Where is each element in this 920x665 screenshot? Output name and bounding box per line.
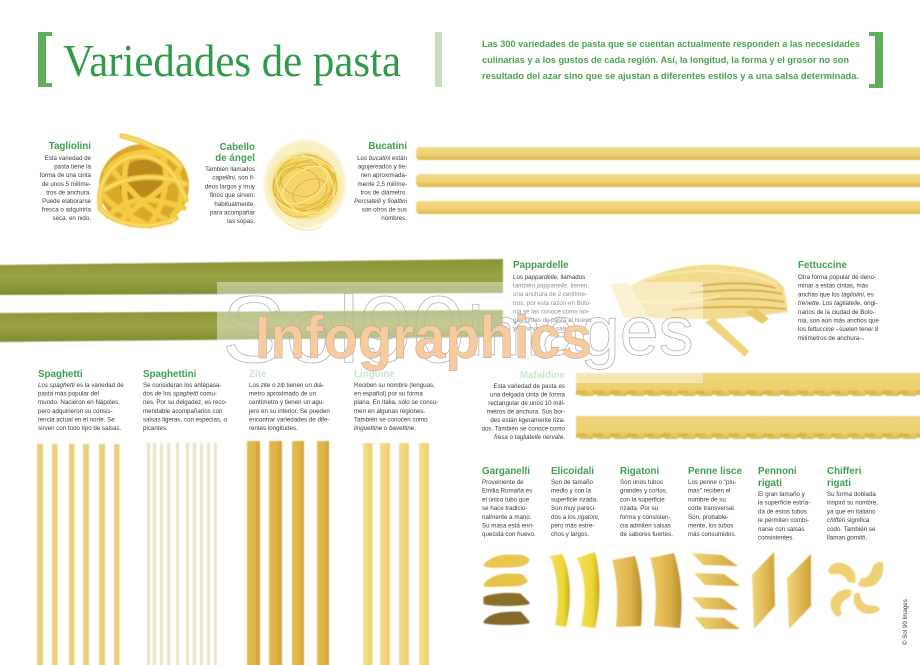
panel: garganelli: Garganelli xyxy=(482,466,530,477)
panel: pappardelle: tros, por esta razón en Bolo- xyxy=(513,300,591,307)
panel: spaghetti: Spaghetti xyxy=(38,369,83,380)
panel: zite xyxy=(247,369,330,665)
panel: spaghetti: sirven con todo tipo de salsas. xyxy=(38,425,122,432)
panel: linguine: plana. En Italia, sólo se consu- xyxy=(354,399,438,406)
panel: fettuccine: anchas que los tagliolini, es xyxy=(798,291,874,298)
panel: penne lisce: Penne lisce xyxy=(688,466,742,477)
panel: rigatoni: Son unos tubos xyxy=(620,479,663,486)
panel: fettuccine: minar a estas cintas, más xyxy=(798,283,868,290)
panel: elicoidali: Son de tamaño xyxy=(551,479,594,486)
panel: garganelli xyxy=(482,466,536,624)
panel: spaghettini: mendable acompañarlos con xyxy=(143,408,223,415)
panel: cabello de angel: deos largos y muy xyxy=(205,183,256,190)
panel: rigatoni: de sabores fuertes. xyxy=(620,531,673,538)
panel: cabello de angel: habitualmente, xyxy=(214,201,255,208)
panel: linguine: linguettine o bavettine. xyxy=(354,425,416,432)
panel: zite: encontrar variedades de dife- xyxy=(249,416,330,423)
panel: chifferi rigati: rigati xyxy=(827,478,851,489)
panel: garganelli: nalmente a mano. xyxy=(482,514,532,521)
panel: mafaldine: metros de anchura. Sus bor- xyxy=(487,408,565,416)
panel: rigatoni: cia admiten salsas xyxy=(620,522,671,530)
panel: chifferi rigati xyxy=(827,466,883,617)
icon: mafaldine strands xyxy=(576,373,920,439)
panel: chifferi rigati: chifferi significa xyxy=(827,517,869,524)
panel: chifferi rigati: codo. También se xyxy=(827,526,876,533)
icon: spaghetti strands xyxy=(37,444,120,665)
panel: fettuccine: Fettuccine xyxy=(798,260,848,271)
panel: spaghetti: pasta más popular del xyxy=(38,391,99,398)
panel: chifferi rigati: llaman gomitti. xyxy=(827,534,867,542)
icon: elicoidali xyxy=(550,552,600,628)
panel: linguine: en español) por su forma xyxy=(354,391,423,398)
panel: zite: jero en su interior. Se pueden xyxy=(248,408,330,415)
panel: spaghetti: pero adquirieron su consis- xyxy=(38,408,113,415)
panel: pennoni rigati: la superficie estría- xyxy=(758,500,810,507)
panel: garganelli: Proveniente de xyxy=(482,479,524,486)
panel: pappardelle: gas cintas de pasta al huevo xyxy=(513,317,592,324)
panel: tagliolini: tros de anchura. xyxy=(46,189,91,196)
panel: zite: metro aproximado de un xyxy=(249,391,317,398)
credit: © Sol 90 Images xyxy=(902,599,909,645)
icon: cabello de angel nest xyxy=(263,140,346,230)
panel: fettuccine: milímetros de anchura–. xyxy=(798,335,865,342)
panel: fettuccine: nia, son aún más anchos que xyxy=(798,318,879,324)
panel: pappardelle: Pappardelle xyxy=(513,260,569,271)
watermark xyxy=(217,277,703,383)
panel: cabello de angel: de ángel xyxy=(215,153,255,164)
panel: cabello de angel xyxy=(205,140,346,230)
panel: bucatini: Perciatelli y fioattini xyxy=(354,198,407,205)
panel: chifferi rigati: Chifferi xyxy=(827,466,862,477)
panel: penne lisce xyxy=(688,466,742,629)
panel: linguine: men en algunas regiones. xyxy=(354,408,425,415)
panel: cabello de angel: para acompañar xyxy=(210,210,255,216)
panel: spaghettini: Se consideran los antepasa- xyxy=(143,382,221,389)
panel: penne lisce: Son, probable- xyxy=(688,514,729,521)
icon: spaghettini strands xyxy=(147,443,217,665)
panel: mafaldine: dos. También se conoce como xyxy=(482,426,566,432)
panel: mafaldine xyxy=(482,370,920,441)
watermark: Sol90 xyxy=(222,277,465,383)
panel: pappardelle: también pappanelle, tienen xyxy=(513,283,587,290)
green pasta strips xyxy=(0,259,503,342)
panel: cabello de angel: Cabello xyxy=(220,142,255,153)
panel: spaghettini: Spaghettini xyxy=(143,369,197,380)
panel: mafaldine: rectangular de unos 10 milí- xyxy=(488,400,565,407)
panel: spaghetti xyxy=(37,369,124,665)
icon: bucatini strands xyxy=(416,147,920,214)
panel: elicoidali xyxy=(550,466,600,628)
panel: rigatoni: grandes y cortos, xyxy=(620,488,668,495)
panel: tagliolini: fresca o adquirirla xyxy=(42,207,92,214)
panel: garganelli: quecida con huevo. xyxy=(482,531,536,538)
panel: spaghetti: Los spaghetti es la variedad de xyxy=(38,382,124,389)
panel: cabello de angel: las sopas. xyxy=(227,218,255,225)
panel: linguine: Linguine xyxy=(354,369,395,380)
panel: pappardelle: y se sirven con salsas. xyxy=(513,326,576,333)
panel: penne lisce: más consumidos. xyxy=(688,531,736,538)
heading: Variedades de pasta xyxy=(63,36,401,86)
panel: tagliolini: seca, en nido. xyxy=(52,215,91,222)
panel: garganelli: Su masa está enri- xyxy=(482,522,534,530)
panel: tagliolini: forma de una cinta xyxy=(40,172,92,179)
panel: fettuccine: narios de la ciudad de Bolo- xyxy=(798,309,875,316)
panel: tagliolini: Puede elaborarse xyxy=(42,198,92,205)
panel: tagliolini xyxy=(40,136,189,228)
panel: pennoni rigati: El gran tamaño y xyxy=(758,491,806,498)
panel: tagliolini: de unos 5 milíme- xyxy=(42,181,91,188)
panel: elicoidali: dos a los rigatoni, xyxy=(551,514,600,521)
watermark: images xyxy=(468,292,694,370)
panel: zite: Los zite o ziti tienen un diá- xyxy=(249,382,324,389)
divider bar xyxy=(435,32,442,87)
panel: elicoidali: Son muy pareci- xyxy=(551,505,596,512)
panel: spaghettini: salsas ligeras, con especias, o xyxy=(143,416,227,423)
panel: tagliolini: Esta variedad de xyxy=(45,155,92,162)
panel: rigatoni: Rigatoni xyxy=(620,466,659,477)
icon: penne lisce xyxy=(692,553,740,629)
panel: garganelli: el único tubo que xyxy=(482,496,530,503)
intro text: resultado del azar sino que se ajustan a diferentes estilos y a una salsa determinada. xyxy=(482,70,859,81)
panel: rigatoni: rizada. Por su xyxy=(620,505,659,512)
panel: fettuccine xyxy=(798,260,879,342)
intro text: Las 300 variedades de pasta que se cuentan actualmente responden a las necesidades xyxy=(482,38,860,49)
panel: penne lisce: nombre de su xyxy=(688,496,726,503)
icon: garganelli xyxy=(485,556,528,624)
panel: spaghettini xyxy=(143,369,227,665)
panel: elicoidali: chos y largos. xyxy=(551,531,589,538)
panel: penne lisce: mente, los tubos xyxy=(688,522,733,530)
panel: penne lisce: corte transversal. xyxy=(688,505,736,512)
panel: linguine: También se conocen como xyxy=(354,416,428,423)
panel: rigatoni: con la superficie xyxy=(620,496,665,503)
icon: linguine strands xyxy=(363,443,429,665)
panel: rigatoni xyxy=(612,466,682,628)
panel: mafaldine: des están ligeramente riza- xyxy=(490,417,565,424)
panel: garganelli: Emilia Romaña es xyxy=(482,488,532,495)
left bracket xyxy=(38,32,52,87)
icon: fettuccine nest xyxy=(610,265,788,357)
title xyxy=(38,32,401,87)
icon: tagliolini nest xyxy=(99,136,189,228)
panel: pappardelle: nia se las conoce como lon- xyxy=(513,308,590,315)
panel: pennoni rigati: Pennoni xyxy=(758,466,797,477)
panel: pappardelle: una anchura de 2 centíme- xyxy=(513,291,587,298)
panel: cabello de angel: capellini, son fi- xyxy=(212,175,255,182)
panel: pennoni rigati: rigati xyxy=(758,478,782,489)
panel: pennoni rigati: da de estos tubos xyxy=(758,508,807,515)
watermark: Infographics xyxy=(255,304,592,371)
icon: rigatoni xyxy=(612,553,682,628)
panel: pennoni rigati: narse con salsas xyxy=(758,526,804,533)
panel: bucatini: Bucatini xyxy=(368,141,407,152)
panel: mafaldine: una delgada cinta de forma xyxy=(490,392,566,398)
right bracket xyxy=(869,32,883,88)
panel: chifferi rigati: Su forma doblada xyxy=(827,491,876,498)
panel: garganelli: se hace tradicio- xyxy=(482,505,527,512)
panel: zite: rentes longitudes. xyxy=(249,425,298,432)
panel: penne lisce: Los penne o "plu- xyxy=(688,479,736,486)
panel: bucatini: nen aproximada- xyxy=(361,172,407,179)
panel: spaghetti: tencia actual en el norte. Se xyxy=(38,416,115,423)
panel: elicoidali: superficie rizada. xyxy=(551,496,598,503)
panel: pappardelle: Los pappardelle, llamados xyxy=(513,274,585,281)
panel: spaghetti: mundo. Nacieron en Nápoles, xyxy=(38,399,120,406)
panel: pennoni rigati: le permiten combi- xyxy=(758,517,809,524)
panel: zite: Zite xyxy=(249,369,267,380)
panel: fettuccine: trenette. Los tagliatelle, origi- xyxy=(798,300,877,307)
icon: pennoni rigati xyxy=(752,552,811,629)
panel: cabello de angel: También llamados xyxy=(205,166,255,173)
panel: elicoidali: pero más estre- xyxy=(551,522,594,530)
panel: bucatini: son otros de sus xyxy=(362,207,407,214)
panel: bucatini: tros de diámetro. xyxy=(361,189,407,196)
panel: penne lisce: mas" reciben el xyxy=(688,488,730,495)
panel: chifferi rigati: inspiró su nombre, xyxy=(827,500,878,507)
intro text xyxy=(482,38,860,81)
panel: zite: centímetro y tienen un agu- xyxy=(249,399,324,406)
icon: chifferi rigati xyxy=(828,562,883,617)
panel: bucatini: Los bucatini están xyxy=(357,155,407,162)
panel: fettuccine: Otra forma popular de deno- xyxy=(798,274,876,281)
panel: cabello de angel: finos que sirven, xyxy=(210,192,255,199)
panel: tagliolini: pasta tiene la xyxy=(54,164,92,171)
panel: spaghettini: nes. Por su delgadez, es reco- xyxy=(143,399,227,406)
intro text: culinarias y a los gustos de cada región. Así, la longitud, la forma y el grosor no son xyxy=(482,54,849,65)
panel: elicoidali: Elicoidali xyxy=(551,466,594,477)
panel: elicoidali: medio y con la xyxy=(551,488,591,495)
panel: mafaldine: fresa o tagliatelle nervate. xyxy=(494,434,565,441)
icon: zite tubes xyxy=(247,441,329,665)
panel: mafaldine: Esta variedad de pasta es xyxy=(493,383,565,390)
panel: pappardelle xyxy=(513,260,592,333)
panel: linguine: Reciben su nombre (lenguas, xyxy=(354,382,435,389)
panel: spaghettini: dos de los spaghetti comu- xyxy=(143,391,217,398)
panel: bucatini xyxy=(354,141,920,222)
panel: bucatini: nombres. xyxy=(381,215,407,222)
panel: mafaldine: Mafaldine xyxy=(520,370,566,381)
panel: spaghettini: picantes. xyxy=(143,425,168,432)
panel: linguine xyxy=(354,369,438,665)
panel: bucatini: mente 2,5 milíme- xyxy=(357,181,407,188)
panel: tagliolini: Tagliolini xyxy=(49,141,91,152)
panel: pennoni rigati: consistentes. xyxy=(758,534,794,542)
panel: chifferi rigati: ya que en italiano xyxy=(827,508,876,515)
panel: fettuccine: los fettuccine –suelen tener 8 xyxy=(798,326,879,333)
panel: rigatoni: forma y consisten- xyxy=(620,514,671,521)
panel: pennoni rigati xyxy=(752,466,811,629)
panel: bucatini: agujereados y tie- xyxy=(358,164,407,171)
